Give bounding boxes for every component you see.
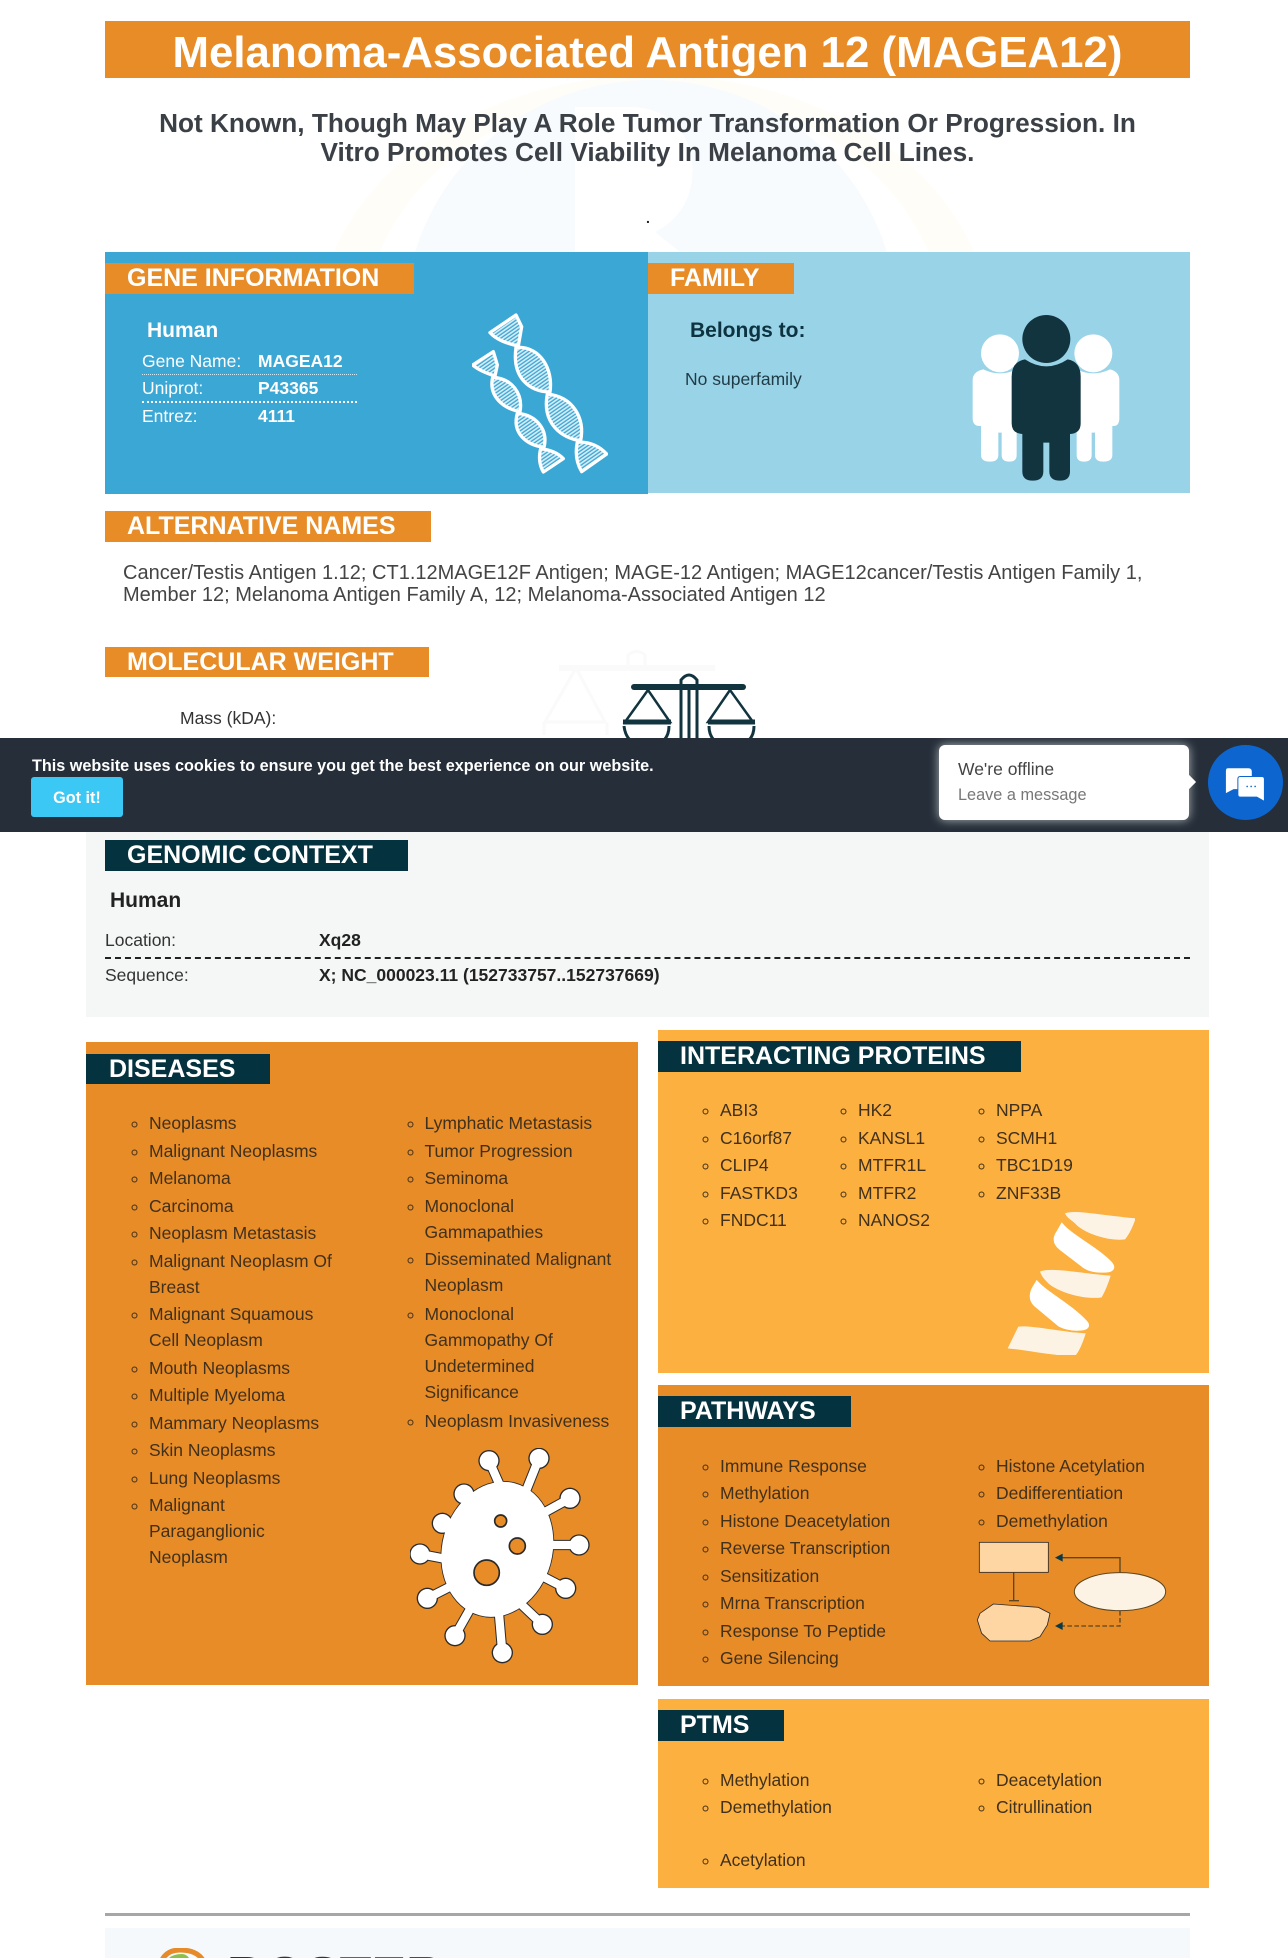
gene name row: Gene Name:: [142, 351, 241, 371]
list: diseases column 1: Cell Neoplasm: [149, 1330, 263, 1350]
alternative names text: [123, 562, 1142, 606]
list: diseases column 1: Skin Neoplasms: [149, 1440, 275, 1460]
list: proteins column 2: HK2: [858, 1100, 892, 1120]
list: proteins column 3: TBC1D19: [996, 1155, 1073, 1175]
list: diseases column 1: Malignant: [149, 1495, 225, 1515]
list: ptms column 2: [978, 1770, 1102, 1817]
panel: gene information: [105, 252, 648, 494]
list: diseases column 1: Mammary Neoplasms: [149, 1412, 319, 1432]
list: proteins column 3: NPPA: [996, 1100, 1042, 1120]
icon: virus: [410, 1448, 590, 1664]
sequence row: Sequence:: [105, 965, 189, 985]
cookie button: Got it!: [53, 789, 101, 807]
family value: No superfamily: [685, 369, 802, 389]
list: proteins column 1: ABI3: [720, 1100, 758, 1120]
list: pathways column 1: Histone Deacetylation: [720, 1510, 890, 1530]
entrez row: 4111: [258, 406, 295, 426]
list: pathways column 2: [978, 1456, 1145, 1530]
list: proteins column 3: SCMH1: [996, 1128, 1057, 1148]
list: diseases column 2: [408, 1113, 612, 1430]
heading: pathways: PATHWAYS: [680, 1397, 816, 1425]
chat tooltip: [939, 745, 1189, 820]
watermark logo: [320, 70, 990, 252]
location row: [105, 931, 1190, 959]
list: proteins column 2: NANOS2: [858, 1210, 930, 1230]
panel: diseases: [86, 1042, 638, 1685]
heading: ptms: [658, 1710, 784, 1741]
panel: interacting proteins: [658, 1030, 1209, 1373]
panel: family: [648, 252, 1190, 493]
list: pathways column 2: Histone Acetylation: [996, 1456, 1145, 1476]
cookie message: This website uses cookies to ensure you get the best experience on our website.: [32, 757, 654, 775]
list: diseases column 2: Monoclonal: [424, 1196, 514, 1216]
dot text: .: [646, 210, 650, 226]
list: proteins column 1: CLIP4: [720, 1155, 769, 1175]
list: diseases column 1: Multiple Myeloma: [149, 1385, 285, 1405]
list: diseases column 1: [132, 1113, 332, 1567]
list: pathways column 1: Response To Peptide: [720, 1620, 886, 1640]
chat button: [1208, 745, 1283, 820]
heading: molecular weight: MOLECULAR WEIGHT: [127, 648, 394, 676]
list: ptms column 2: Citrullination: [996, 1797, 1092, 1817]
list: diseases column 2: Disseminated Malignant: [424, 1249, 611, 1269]
heading: family: FAMILY: [670, 264, 759, 292]
list: proteins column 1: C16orf87: [720, 1128, 792, 1148]
sequence row: [105, 965, 660, 985]
list: ptms extra item: Acetylation: [720, 1850, 806, 1870]
list: diseases column 2: Gammapathies: [424, 1222, 543, 1242]
icon: pathway diagram: [976, 1542, 1166, 1642]
icon: people: [972, 315, 1120, 481]
icon: scale: [622, 674, 756, 738]
list: pathways column 1: [702, 1456, 890, 1668]
icon: protein helix: [1008, 1212, 1135, 1355]
gene name row: MAGEA12: [258, 351, 343, 371]
list: diseases column 2: Neoplasm: [424, 1275, 503, 1295]
list: proteins column 2: MTFR2: [858, 1182, 916, 1202]
list: proteins column 1: FASTKD3: [720, 1182, 798, 1202]
list: pathways column 1: Methylation: [720, 1483, 810, 1503]
list: pathways column 1: Gene Silencing: [720, 1648, 839, 1668]
list: diseases column 2: Seminoma: [424, 1168, 508, 1188]
list: pathways column 2: Demethylation: [996, 1510, 1108, 1530]
heading: pathways: [658, 1396, 851, 1427]
list: ptms column 2: Deacetylation: [996, 1770, 1102, 1790]
panel: ptms: [658, 1699, 1209, 1888]
offline text: We're offline: [958, 759, 1054, 779]
list: proteins column 2: [840, 1100, 930, 1230]
species label: Human: [110, 889, 181, 912]
list: ptms column 1: Methylation: [720, 1770, 810, 1790]
heading: family: [648, 263, 794, 294]
tooltip arrow: [1182, 775, 1196, 789]
list: diseases column 1: Melanoma: [149, 1168, 231, 1188]
sequence row: X; NC_000023.11 (152733757..152737669): [319, 965, 660, 985]
list: diseases column 1: Paraganglionic: [149, 1521, 265, 1541]
list: proteins column 2: KANSL1: [858, 1128, 925, 1148]
heading: interacting proteins: INTERACTING PROTEINS: [680, 1042, 986, 1070]
uniprot row: Uniprot:: [142, 378, 203, 398]
list: pathways column 2: Dedifferentiation: [996, 1483, 1123, 1503]
heading: ptms: PTMS: [680, 1711, 749, 1739]
list: diseases column 1: Mouth Neoplasms: [149, 1358, 290, 1378]
icon: logo: [160, 1948, 204, 1958]
entrez row: Entrez:: [142, 406, 197, 426]
subtitle: Vitro Promotes Cell Viability In Melanoma Cell Lines.: [321, 137, 974, 167]
list: diseases column 1: Carcinoma: [149, 1196, 234, 1216]
uniprot row: P43365: [258, 378, 318, 398]
list: pathways column 1: Mrna Transcription: [720, 1593, 865, 1613]
list: diseases column 1: Neoplasm Metastasis: [149, 1223, 316, 1243]
mass label: Mass (kDA):: [180, 708, 276, 728]
title: Melanoma-Associated Antigen 12 (MAGEA12): [173, 28, 1122, 77]
location row: Location:: [105, 930, 176, 950]
list: diseases column 2: Tumor Progression: [424, 1140, 573, 1160]
list: proteins column 3: [978, 1100, 1073, 1202]
list: proteins column 3: ZNF33B: [996, 1182, 1061, 1202]
location row: Xq28: [319, 930, 361, 950]
panel: footer: [105, 1928, 1190, 1958]
list: diseases column 1: Breast: [149, 1276, 200, 1296]
gene name row: [142, 352, 357, 375]
entrez row: [142, 406, 295, 426]
heading: alternative names: ALTERNATIVE NAMES: [127, 512, 396, 540]
belongs to label: Belongs to:: [690, 319, 806, 342]
list: diseases column 2: Neoplasm Invasiveness: [424, 1410, 609, 1430]
list: diseases column 1: Malignant Squamous: [149, 1304, 313, 1324]
leave message text: Leave a message: [958, 786, 1087, 804]
list: pathways column 1: Sensitization: [720, 1566, 819, 1586]
list: ptms column 1: Demethylation: [720, 1797, 832, 1817]
list: proteins column 1: [702, 1100, 798, 1230]
list: diseases column 1: Malignant Neoplasm Of: [149, 1250, 332, 1270]
heading: gene information: GENE INFORMATION: [127, 264, 379, 292]
subtitle: [159, 108, 1136, 167]
species label: Human: [147, 319, 218, 342]
cookie banner: [0, 738, 1288, 832]
list: pathways column 1: Immune Response: [720, 1456, 867, 1476]
list: ptms column 1: [702, 1770, 832, 1817]
list: diseases column 2: Lymphatic Metastasis: [424, 1113, 592, 1133]
alternative names text: Member 12; Melanoma Antigen Family A, 12; Melanoma-Associated Antigen 12: [123, 584, 826, 606]
list: diseases column 1: Neoplasms: [149, 1113, 237, 1133]
cookie button: [31, 777, 123, 817]
panel: genomic context: [86, 832, 1209, 1017]
heading: diseases: DISEASES: [109, 1055, 235, 1083]
list: diseases column 1: Malignant Neoplasms: [149, 1140, 317, 1160]
list: pathways column 1: Reverse Transcription: [720, 1538, 890, 1558]
panel: pathways: [658, 1385, 1209, 1686]
list: diseases column 2: Undetermined: [424, 1356, 534, 1376]
list: diseases column 1: Neoplasm: [149, 1547, 228, 1567]
heading: genomic context: GENOMIC CONTEXT: [127, 841, 373, 869]
list: diseases column 1: Lung Neoplasms: [149, 1468, 280, 1488]
list: diseases column 2: Significance: [424, 1382, 519, 1402]
subtitle: Not Known, Though May Play A Role Tumor Transformation Or Progression. In: [159, 108, 1136, 138]
list: diseases column 2: Monoclonal: [424, 1304, 514, 1324]
list: diseases column 2: Gammopathy Of: [424, 1330, 553, 1350]
list: proteins column 2: MTFR1L: [858, 1155, 926, 1175]
heading: diseases: [86, 1054, 270, 1084]
footer rule: [105, 1913, 1190, 1916]
uniprot row: [142, 379, 357, 403]
list: proteins column 1: FNDC11: [720, 1210, 787, 1230]
icon: ghost scale: [540, 650, 720, 740]
alternative names text: Cancer/Testis Antigen 1.12; CT1.12MAGE12F Antigen; MAGE-12 Antigen; MAGE12cancer/Testis Antigen Family 1,: [123, 562, 1142, 584]
icon: dna: [472, 313, 608, 474]
